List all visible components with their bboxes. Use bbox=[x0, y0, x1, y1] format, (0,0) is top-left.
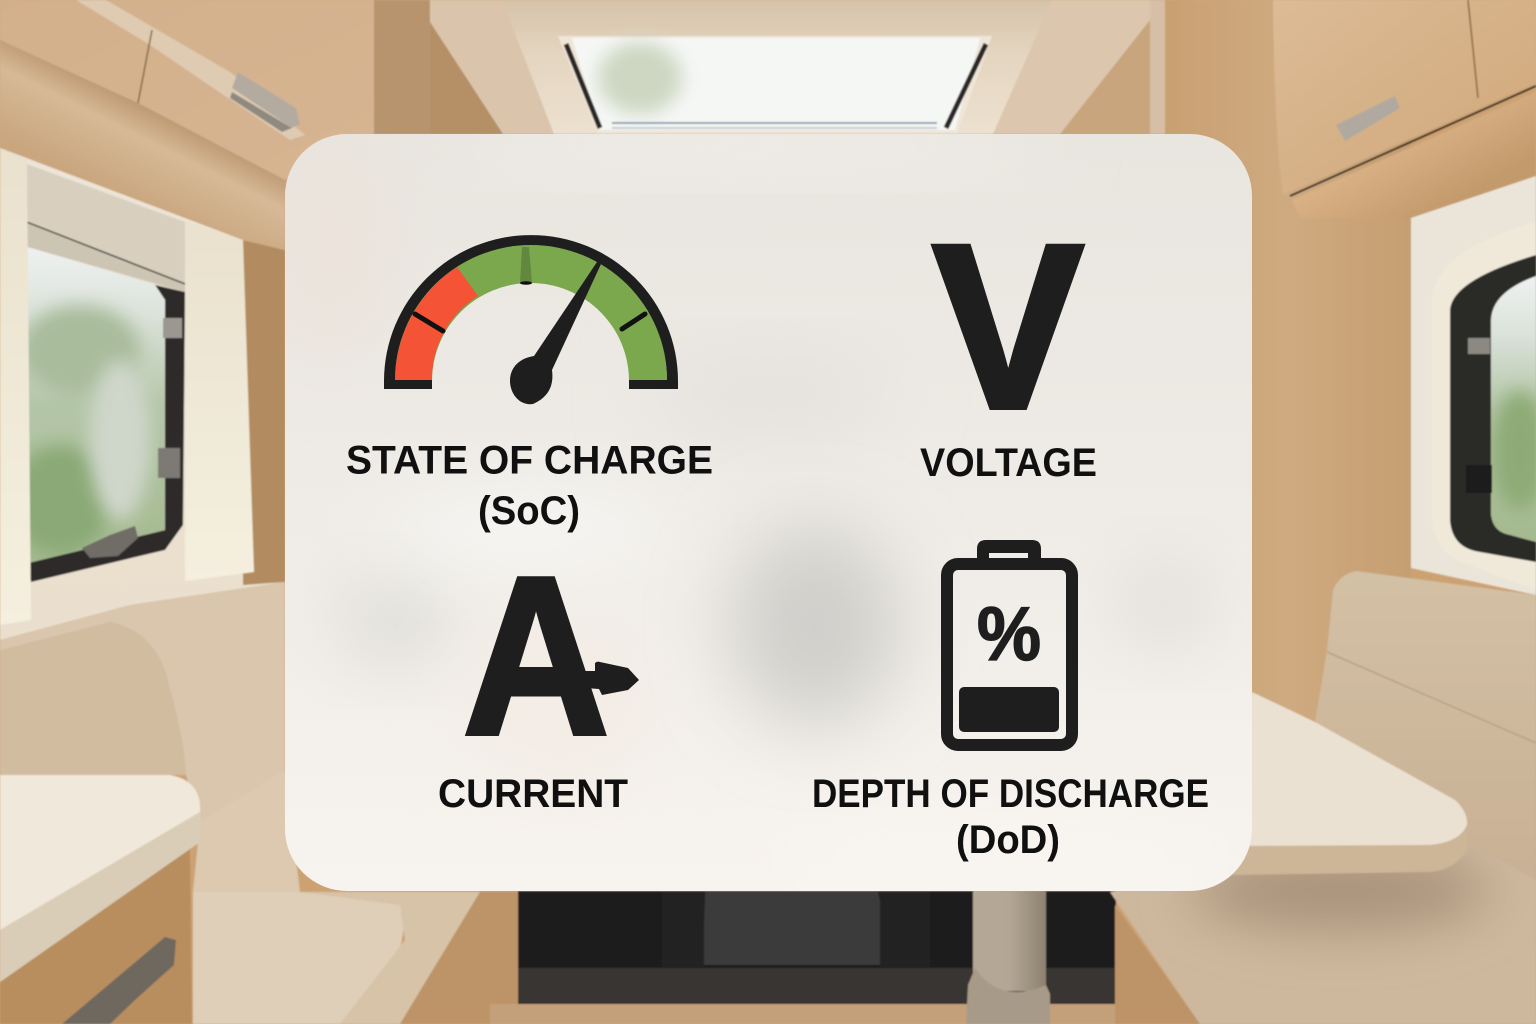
right seat bbox=[1110, 842, 1536, 1024]
ceiling sides bbox=[430, 0, 1165, 134]
label: state of charge: STATE OF CHARGE bbox=[346, 438, 713, 482]
left upper cabinets bbox=[0, 0, 374, 250]
right wall and window bbox=[1327, 176, 1536, 743]
right upper cabinets bbox=[1273, 0, 1536, 218]
left wood post bbox=[243, 240, 285, 585]
label: SoC: (SoC) bbox=[478, 489, 580, 533]
icon: voltage letter V: V bbox=[933, 197, 1083, 457]
table top bbox=[1230, 692, 1467, 875]
icon: state of charge gauge bbox=[384, 235, 678, 404]
left bench bbox=[0, 582, 518, 1024]
floor and aisle bbox=[490, 891, 1130, 1024]
skylight bbox=[558, 36, 992, 134]
icon: depth of discharge battery bbox=[947, 540, 1072, 745]
ceiling panel bbox=[502, 0, 1052, 134]
right bench back bbox=[1315, 571, 1536, 880]
right wood wall bbox=[1165, 0, 1411, 720]
gauge needle bbox=[510, 262, 601, 404]
label: DoD: (DoD) bbox=[956, 818, 1060, 862]
left curtains bbox=[0, 148, 254, 625]
panel: frosted card bbox=[280, 123, 1252, 891]
left wall bbox=[0, 148, 285, 640]
table pedestal bbox=[966, 891, 1050, 1024]
label: depth of discharge: DEPTH OF DISCHARGE bbox=[812, 772, 1209, 816]
icon: depth of discharge battery: % bbox=[977, 592, 1041, 677]
left window bbox=[10, 163, 185, 582]
icon: current letter A with arrow: A bbox=[463, 530, 609, 782]
left wood pillar bbox=[374, 0, 430, 134]
label: voltage: VOLTAGE bbox=[920, 441, 1097, 485]
label: current: CURRENT bbox=[438, 772, 628, 816]
left counter bbox=[0, 775, 200, 1024]
panel blur blobs bbox=[285, 180, 1188, 745]
